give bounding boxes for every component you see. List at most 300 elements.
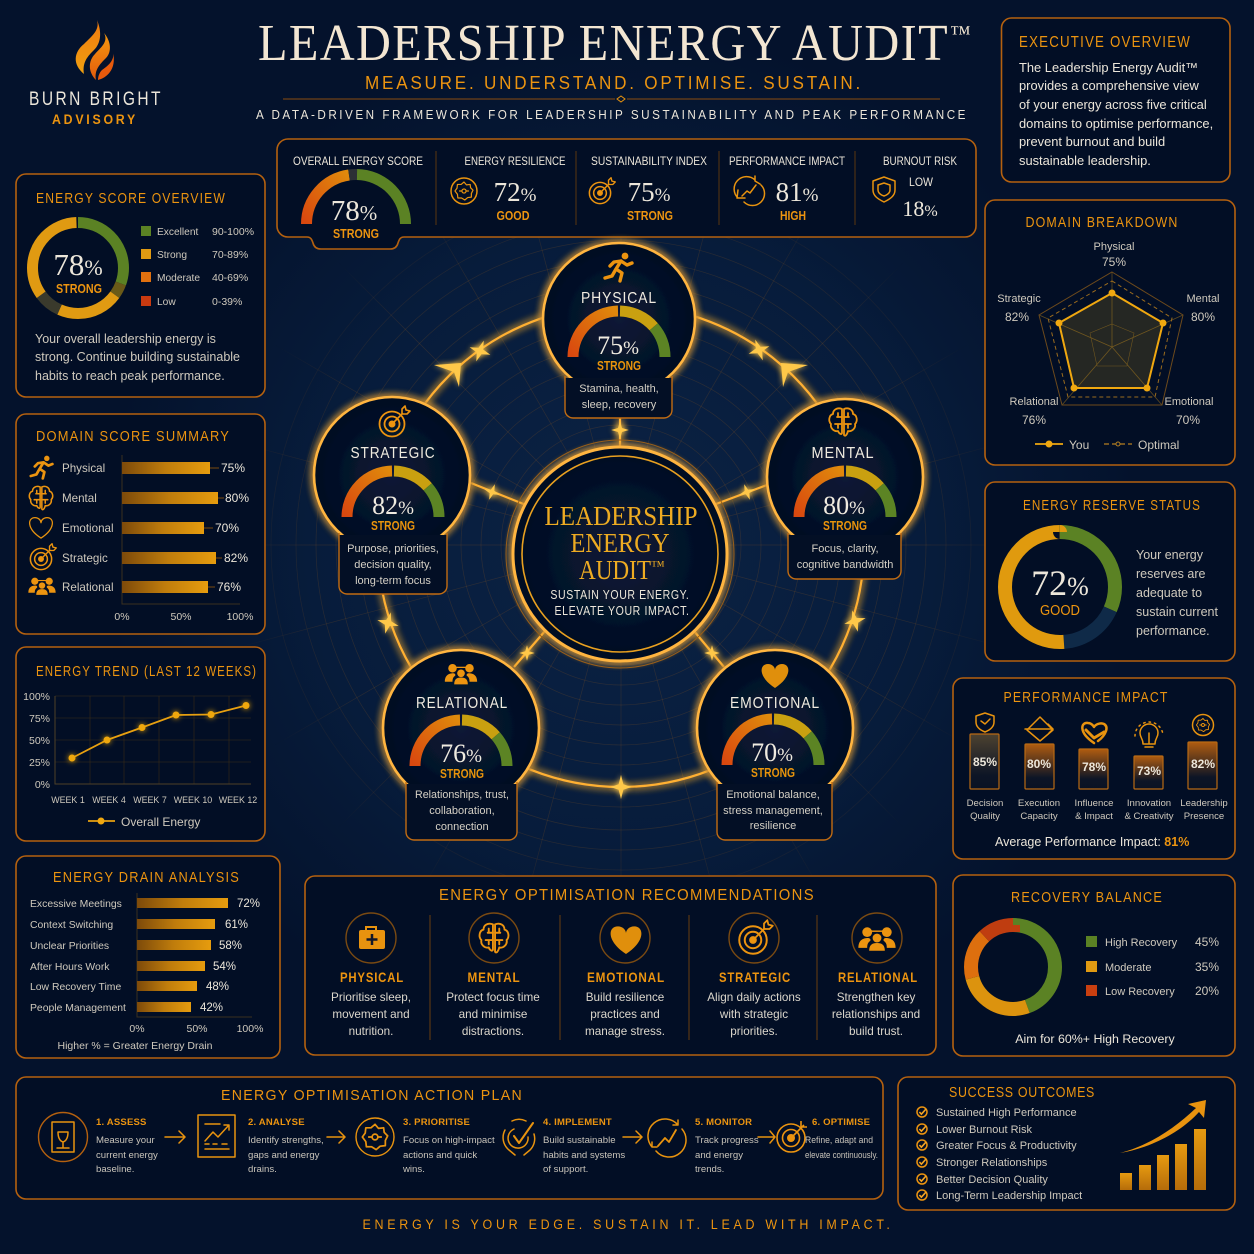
- axis labels: 100%: [237, 1023, 263, 1035]
- item: physical: nutrition.: [349, 1025, 393, 1038]
- text: overview body: The Leadership Energy Audit™: [1019, 60, 1198, 75]
- radar labels: Strategic: [997, 293, 1041, 305]
- panel: action plan: [16, 1077, 883, 1199]
- title: LEADERSHIP ENERGY AUDIT: [258, 15, 949, 72]
- heading: recommendations: ENERGY OPTIMISATION RECOMMENDATIONS: [439, 887, 815, 904]
- node title: MENTAL: [812, 445, 874, 462]
- text: overview body: prevent burnout and build: [1019, 134, 1165, 149]
- item: relational: Strengthen key: [837, 991, 915, 1004]
- donut label: GOOD: [1040, 603, 1080, 619]
- icon: runner: [605, 253, 632, 281]
- node description: Relationships, trust,: [415, 789, 509, 801]
- legend: 20%: [1195, 984, 1219, 998]
- axis labels: 0%: [129, 1023, 145, 1035]
- row: physical: 75%: [221, 461, 245, 475]
- axis labels: [114, 611, 253, 623]
- arrow: [327, 1131, 345, 1143]
- item: physical: movement and: [332, 1008, 410, 1021]
- line chart: [23, 691, 257, 805]
- step 6: optimise: [777, 1117, 878, 1161]
- radar legend: You: [1069, 438, 1089, 452]
- row: mental: Mental: [62, 492, 97, 505]
- bar chart: drains: Low Recovery Time: [30, 982, 121, 993]
- radar labels: Relational: [1010, 396, 1058, 408]
- node description: collaboration,: [429, 805, 495, 817]
- legend: 40-69%: [212, 272, 248, 284]
- item: mental: Protect focus time: [446, 991, 540, 1004]
- step 4: implement: Build sustainable: [543, 1135, 616, 1146]
- axis labels: 50%: [170, 611, 192, 623]
- panel: domain score summary: [16, 414, 265, 634]
- bar values: 82%: [1191, 757, 1215, 771]
- row: relational: 76%: [217, 580, 241, 594]
- step 4: implement: [503, 1117, 625, 1175]
- bar labels: Execution: [1018, 798, 1060, 809]
- domain node: physical: [543, 243, 695, 418]
- hub title: AUDIT: [579, 555, 651, 585]
- icon: brain: [829, 408, 857, 436]
- bar chart: drains: Context Switching: [30, 920, 113, 931]
- KPI: energy resilience: GOOD: [496, 209, 530, 223]
- icon: people: [445, 664, 477, 684]
- row: emotional: Emotional: [62, 522, 114, 535]
- item: strategic: with strategic: [719, 1008, 788, 1021]
- step 5: monitor: and energy: [695, 1150, 743, 1161]
- footnote: Higher % = Greater Energy Drain: [58, 1040, 213, 1052]
- step 5: monitor: Track progress: [695, 1135, 759, 1146]
- domain node: mental: [767, 399, 923, 579]
- radar legend: [1035, 438, 1179, 452]
- step 3: prioritise: 3. PRIORITISE: [403, 1117, 470, 1128]
- item: relational: build trust.: [849, 1025, 903, 1038]
- text: score summary: strong. Continue building sustainable: [35, 350, 240, 364]
- item: relational: RELATIONAL: [838, 969, 918, 985]
- KPI: burnout risk: 18%: [902, 196, 938, 221]
- heading: performance impact: PERFORMANCE IMPACT: [1004, 689, 1168, 706]
- checklist: [917, 1107, 1082, 1202]
- node value: 82%: [372, 491, 414, 520]
- step 4: implement: of support.: [543, 1164, 588, 1175]
- legend: High Recovery: [1105, 937, 1178, 949]
- node description: Stamina, health,: [579, 383, 659, 395]
- node value: 80%: [823, 491, 865, 520]
- KPI: burnout risk: [873, 154, 957, 221]
- bar labels: [967, 798, 1228, 822]
- bar values: 85%: [973, 755, 997, 769]
- node description: decision quality,: [354, 559, 432, 571]
- legend: 70-89%: [212, 249, 248, 261]
- node title: EMOTIONAL: [730, 695, 820, 712]
- KPI: sustainability index: 75%: [628, 177, 671, 207]
- bar chart: drains: After Hours Work: [30, 962, 110, 973]
- node description: connection: [435, 821, 489, 833]
- step 4: implement: habits and systems: [543, 1150, 625, 1161]
- radar chart: [1039, 272, 1183, 405]
- legend: 90-100%: [212, 226, 254, 238]
- item: strategic: [707, 913, 801, 1038]
- checklist: Greater Focus & Productivity: [936, 1140, 1077, 1152]
- panel: energy reserve status: [985, 482, 1235, 661]
- bars: [970, 734, 1217, 789]
- bar chart: drains: 42%: [200, 1002, 223, 1014]
- heading: domain breakdown: DOMAIN BREAKDOWN: [1026, 214, 1178, 231]
- node status: STRONG: [440, 767, 484, 781]
- bar labels: Influence: [1075, 798, 1113, 809]
- row: mental: [29, 486, 249, 510]
- panel: energy drain analysis: [16, 856, 280, 1058]
- KPI: energy resilience: [451, 154, 566, 223]
- node status: STRONG: [597, 359, 641, 373]
- node title: PHYSICAL: [581, 290, 657, 307]
- growth chart icon: [1120, 1100, 1206, 1190]
- bar chart: drains: 72%: [237, 898, 260, 910]
- radar labels: 70%: [1176, 413, 1200, 427]
- checklist: Long-Term Leadership Impact: [936, 1190, 1082, 1202]
- radial grid backdrop: [260, 238, 984, 876]
- item: strategic: priorities.: [730, 1025, 778, 1038]
- bar chart: drains: People Management: [30, 1003, 126, 1014]
- bar chart: drains: 48%: [206, 981, 229, 993]
- heading: executive overview: EXECUTIVE OVERVIEW: [1019, 34, 1191, 51]
- item: mental: and minimise: [459, 1008, 527, 1021]
- icon: light bulb: [1135, 722, 1163, 747]
- stars on ring: [375, 336, 868, 799]
- heading: domain score: DOMAIN SCORE SUMMARY: [36, 428, 230, 445]
- checklist: Stronger Relationships: [936, 1157, 1048, 1169]
- line chart: WEEK 1: [51, 795, 85, 805]
- step 5: monitor: [648, 1117, 759, 1175]
- line chart: 0%: [35, 779, 50, 791]
- heading: success outcomes: SUCCESS OUTCOMES: [949, 1085, 1095, 1101]
- KPI: burnout risk: LOW: [909, 177, 933, 189]
- bar chart: drains: 58%: [219, 940, 242, 952]
- gauge: [347, 471, 439, 517]
- hub title: [544, 501, 698, 585]
- KPI: performance impact: HIGH: [780, 209, 806, 223]
- KPI: performance impact: 81%: [776, 177, 819, 207]
- step 2: analyse: gaps and energy: [248, 1150, 320, 1161]
- panel: KPI strip: [277, 139, 976, 249]
- item: strategic: STRATEGIC: [719, 969, 791, 985]
- bar chart: drains: Excessive Meetings: [30, 899, 122, 910]
- heading: recovery balance: RECOVERY BALANCE: [1011, 889, 1163, 906]
- node status: STRONG: [371, 519, 415, 533]
- step 3: prioritise: actions and quick: [403, 1150, 477, 1161]
- line chart: 25%: [29, 757, 50, 769]
- text: reserve note: reserves are: [1136, 567, 1206, 581]
- step 1: assess: baseline.: [96, 1164, 134, 1175]
- row: mental: 80%: [225, 491, 249, 505]
- bar labels: Quality: [970, 811, 1000, 822]
- arrow: [623, 1131, 642, 1143]
- panel: domain breakdown: [985, 200, 1235, 465]
- KPI: performance impact: [729, 154, 846, 223]
- line chart: WEEK 4: [92, 795, 126, 805]
- step 2: analyse: Identify strengths,: [248, 1135, 324, 1146]
- KPI: overall energy score: 78%: [331, 195, 377, 227]
- KPI: sustainability index: SUSTAINABILITY INDEX: [591, 154, 707, 168]
- bar labels: Innovation: [1127, 798, 1171, 809]
- step 1: assess: current energy: [96, 1150, 158, 1161]
- bar labels: Presence: [1184, 811, 1224, 822]
- node description: cognitive bandwidth: [797, 559, 893, 571]
- text: overview body: provides a comprehensive view: [1019, 78, 1200, 93]
- text: score summary: habits to reach peak performance.: [35, 369, 225, 383]
- step 1: assess: 1. ASSESS: [96, 1117, 147, 1128]
- bar values: [973, 755, 1215, 778]
- step 5: monitor: trends.: [695, 1164, 724, 1175]
- row: physical: Physical: [62, 462, 105, 475]
- heading: energy trend: ENERGY TREND (LAST 12 WEEKS): [36, 663, 257, 680]
- footer tagline: ENERGY IS YOUR EDGE. SUSTAIN IT. LEAD WITH IMPACT.: [362, 1217, 894, 1232]
- node description: stress management,: [723, 805, 823, 817]
- radar labels: Mental: [1186, 293, 1220, 305]
- step 6: optimise: Refine, adapt and: [805, 1135, 873, 1146]
- step 6: optimise: 6. OPTIMISE: [812, 1117, 870, 1128]
- legend: [141, 226, 254, 308]
- heading: energy reserve: ENERGY RESERVE STATUS: [1023, 497, 1201, 514]
- step 1: assess: Measure your: [96, 1135, 155, 1146]
- tagline: MEASURE. UNDERSTAND. OPTIMISE. SUSTAIN.: [365, 72, 863, 93]
- heading: action plan: ENERGY OPTIMISATION ACTION PLAN: [221, 1087, 523, 1104]
- bar chart: drains: 61%: [225, 919, 248, 931]
- radar labels: 80%: [1191, 310, 1215, 324]
- bar values: 80%: [1027, 757, 1051, 771]
- legend: Low Recovery: [1105, 986, 1175, 998]
- node title: STRATEGIC: [350, 445, 436, 462]
- text: overview body: domains to optimise performance,: [1019, 116, 1213, 131]
- bar chart: drains: Unclear Priorities: [30, 941, 109, 952]
- text: score summary: Your overall leadership energy is: [35, 332, 216, 346]
- bar labels: & Impact: [1075, 811, 1113, 822]
- node description: long-term focus: [355, 575, 431, 587]
- radar labels: Emotional: [1165, 396, 1213, 408]
- row: strategic: [30, 544, 248, 570]
- icon: flame: [76, 20, 114, 80]
- chart legend: Overall Energy: [121, 815, 200, 829]
- hub tagline: ELEVATE YOUR IMPACT.: [554, 604, 690, 618]
- legend: Excellent: [157, 227, 199, 238]
- checklist: Lower Burnout Risk: [936, 1124, 1032, 1136]
- radar labels: [997, 241, 1220, 427]
- bar values: 73%: [1137, 764, 1161, 778]
- axis labels: 100%: [227, 611, 253, 623]
- row: emotional: [30, 518, 239, 538]
- domain node: relational: [383, 650, 539, 840]
- donut value: 72%: [1031, 563, 1089, 603]
- heading: energy drain: ENERGY DRAIN ANALYSIS: [53, 869, 240, 886]
- checklist: Better Decision Quality: [936, 1174, 1048, 1186]
- legend: Strong: [157, 250, 187, 261]
- donut label: STRONG: [56, 282, 102, 296]
- step 6: optimise: elevate continuously.: [805, 1150, 878, 1161]
- line chart: 50%: [29, 735, 50, 747]
- axis labels: 50%: [186, 1023, 208, 1035]
- item: emotional: Build resilience: [586, 991, 664, 1004]
- line chart: 100%: [23, 691, 50, 703]
- KPI: overall energy score: [293, 154, 423, 241]
- hub title: ™: [651, 559, 665, 574]
- step 5: monitor: 5. MONITOR: [695, 1117, 752, 1128]
- panel: recommendations: [305, 876, 936, 1055]
- KPI: burnout risk: BURNOUT RISK: [883, 154, 957, 168]
- KPI: sustainability index: [589, 154, 707, 223]
- KPI: overall energy score: STRONG: [333, 227, 379, 241]
- item: physical: [331, 913, 411, 1038]
- text: reserve note: performance.: [1136, 624, 1210, 638]
- arrow: [758, 1131, 775, 1143]
- radar labels: 82%: [1005, 310, 1029, 324]
- radar labels: Physical: [1094, 241, 1134, 253]
- legend: 35%: [1195, 960, 1219, 974]
- radar labels: 75%: [1102, 255, 1126, 269]
- row: relational: [28, 578, 241, 595]
- subtitle: A DATA-DRIVEN FRAMEWORK FOR LEADERSHIP SUSTAINABILITY AND PEAK PERFORMANCE: [256, 108, 968, 122]
- logo subtitle: ADVISORY: [52, 112, 138, 127]
- heading: score overview: ENERGY SCORE OVERVIEW: [36, 190, 226, 207]
- legend: 45%: [1195, 935, 1219, 949]
- bar chart: drains: [30, 898, 260, 1014]
- bar chart: drains: 54%: [213, 961, 236, 973]
- row: relational: Relational: [62, 581, 114, 594]
- item: emotional: manage stress.: [585, 1025, 665, 1038]
- KPI: energy resilience: 72%: [494, 177, 537, 207]
- row: strategic: Strategic: [62, 552, 108, 565]
- note: Aim for 60%+ High Recovery: [1015, 1032, 1176, 1046]
- central hub: [506, 440, 734, 668]
- text: reserve note: adequate to: [1136, 586, 1202, 600]
- panel: energy trend: [16, 647, 265, 841]
- legend: Moderate: [1105, 962, 1151, 974]
- item: physical: Prioritise sleep,: [331, 991, 411, 1004]
- icon: heart: [762, 664, 788, 688]
- legend: Moderate: [157, 273, 200, 284]
- bar labels: Leadership: [1180, 798, 1228, 809]
- gauge: [415, 720, 507, 766]
- legend: Low: [157, 297, 176, 308]
- arrow: [165, 1131, 185, 1143]
- item: mental: distractions.: [462, 1025, 524, 1038]
- hub tagline: SUSTAIN YOUR ENERGY.: [550, 588, 689, 602]
- trademark: ™: [950, 21, 971, 45]
- bar labels: Capacity: [1020, 811, 1058, 822]
- KPI: energy resilience: ENERGY RESILIENCE: [464, 154, 566, 168]
- node description: resilience: [750, 820, 796, 832]
- axis labels: 0%: [114, 611, 130, 623]
- bar labels: & Creativity: [1124, 811, 1174, 822]
- average line: Average Performance Impact: 81%: [995, 835, 1189, 849]
- panel: energy score overview: [16, 174, 265, 397]
- node value: 75%: [597, 331, 639, 360]
- icon: arrow diamond: [1025, 717, 1053, 741]
- hub title: ENERGY: [570, 528, 670, 558]
- step 2: analyse: 2. ANALYSE: [248, 1117, 305, 1128]
- panel: recovery balance: [953, 875, 1235, 1056]
- item: mental: [446, 913, 540, 1038]
- icon: shield: [976, 713, 994, 732]
- text: overview body: of your energy across five critical: [1019, 97, 1207, 112]
- legend: [1086, 935, 1219, 998]
- panel: performance impact: [953, 678, 1235, 859]
- bar labels: Decision: [967, 798, 1003, 809]
- panel: success outcomes: [898, 1077, 1235, 1210]
- line chart: WEEK 7: [133, 795, 167, 805]
- legend: 0-39%: [212, 296, 242, 308]
- item: emotional: practices and: [590, 1008, 660, 1021]
- node description: sleep, recovery: [582, 399, 657, 411]
- gauge: [573, 311, 665, 357]
- icon: gear badge: [1192, 714, 1214, 736]
- item: physical: PHYSICAL: [340, 969, 404, 985]
- donut value: 78%: [53, 247, 103, 282]
- radar labels: 76%: [1022, 413, 1046, 427]
- energy ring and connectors: [378, 305, 864, 787]
- step 2: analyse: drains.: [248, 1164, 277, 1175]
- text: overview body: sustainable leadership.: [1019, 153, 1151, 168]
- text: reserve note: sustain current: [1136, 605, 1219, 619]
- domain node: strategic: [314, 397, 470, 594]
- step 1: assess: [38, 1112, 158, 1175]
- logo: Burn Bright Advisory: [29, 20, 163, 127]
- donut: overall score: [32, 222, 124, 314]
- step 2: analyse: [198, 1115, 324, 1175]
- KPI: performance impact: PERFORMANCE IMPACT: [729, 154, 846, 168]
- donut: reserve: [1005, 532, 1115, 642]
- item: relational: [832, 913, 920, 1038]
- checklist: Sustained High Performance: [936, 1107, 1077, 1119]
- node value: 76%: [440, 739, 482, 768]
- item: strategic: Align daily actions: [707, 991, 801, 1004]
- hub title: LEADERSHIP: [544, 501, 698, 531]
- item: relational: relationships and: [832, 1008, 920, 1021]
- bar values: 78%: [1082, 760, 1106, 774]
- icon: target: [380, 406, 410, 436]
- line chart: WEEK 12: [219, 795, 257, 805]
- step 3: prioritise: [356, 1117, 495, 1175]
- panel: executive overview: [1002, 18, 1230, 182]
- step 4: implement: 4. IMPLEMENT: [543, 1117, 612, 1128]
- step 3: prioritise: Focus on high-impact: [403, 1135, 495, 1146]
- node title: RELATIONAL: [416, 695, 508, 712]
- axis labels: [129, 1023, 263, 1035]
- row: physical: [31, 456, 245, 478]
- text: reserve note: Your energy: [1136, 548, 1204, 562]
- gauge: [727, 719, 819, 765]
- item: mental: MENTAL: [468, 969, 520, 985]
- line chart: 75%: [29, 713, 50, 725]
- donut: recovery: [971, 925, 1055, 1009]
- node status: STRONG: [823, 519, 867, 533]
- node description: Purpose, priorities,: [347, 543, 439, 555]
- node value: 70%: [751, 738, 793, 767]
- row: emotional: 70%: [215, 521, 239, 535]
- domain node: emotional: [697, 650, 853, 840]
- node status: STRONG: [751, 766, 795, 780]
- step 3: prioritise: wins.: [402, 1164, 425, 1175]
- item: emotional: EMOTIONAL: [587, 969, 665, 985]
- KPI: sustainability index: STRONG: [627, 209, 673, 223]
- KPI: overall energy score: OVERALL ENERGY SCORE: [293, 154, 423, 168]
- gauge: [799, 471, 891, 517]
- node description: Focus, clarity,: [811, 543, 879, 555]
- logo wordmark: BURN BRIGHT: [29, 89, 163, 110]
- item: emotional: [585, 913, 665, 1038]
- node description: Emotional balance,: [726, 789, 820, 801]
- row: strategic: 82%: [224, 551, 248, 565]
- line chart: WEEK 10: [174, 795, 212, 805]
- radar legend: Optimal: [1138, 438, 1179, 452]
- icon: heart: [1082, 723, 1106, 743]
